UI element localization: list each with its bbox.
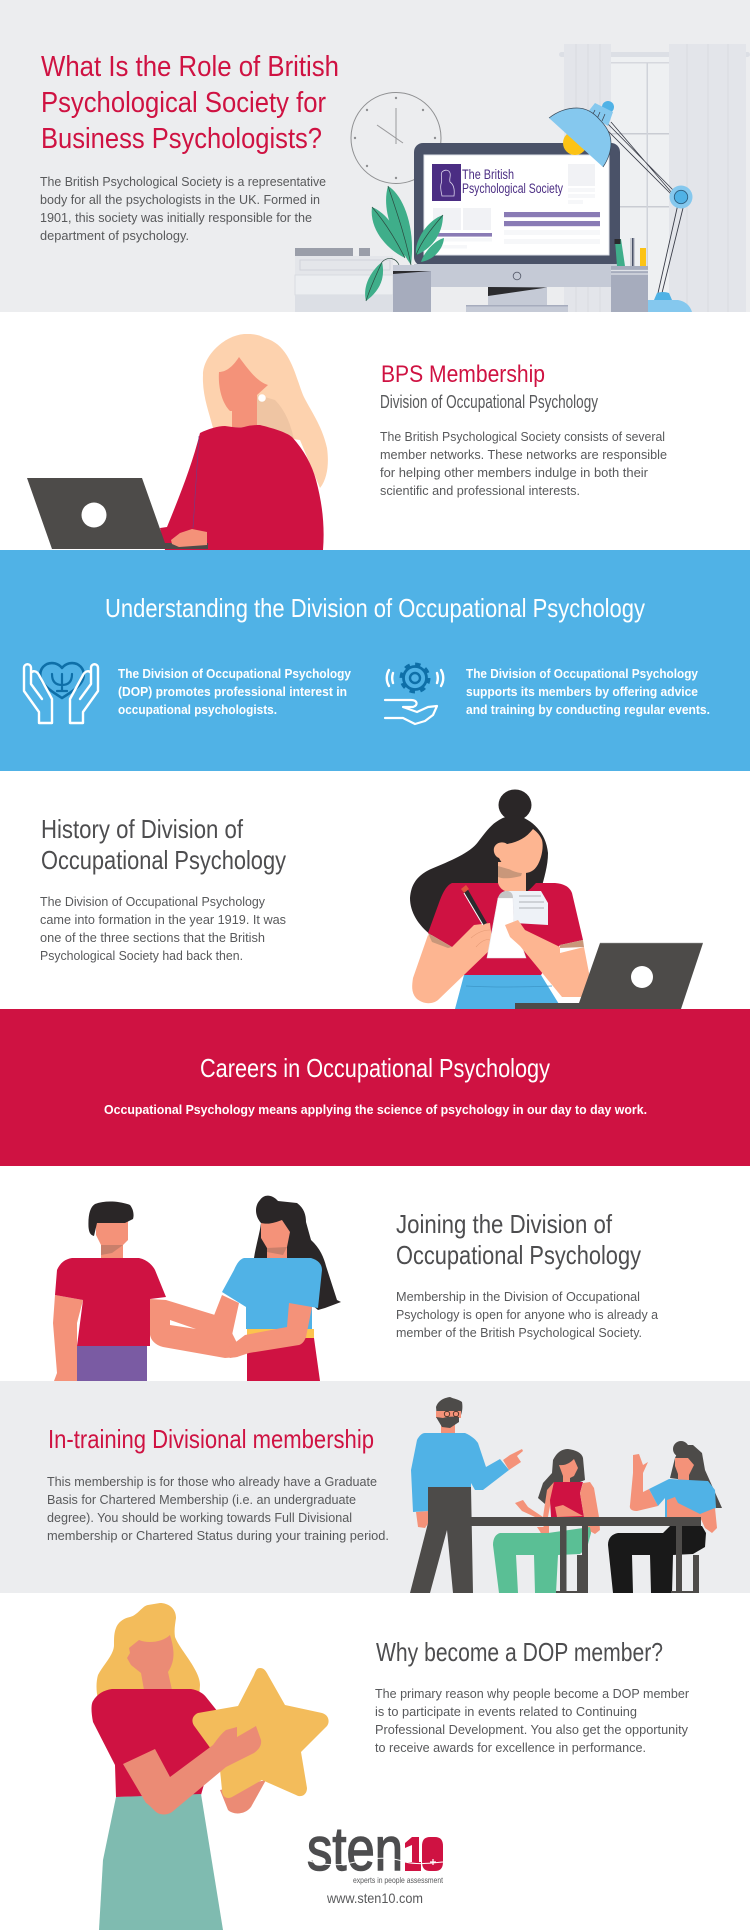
figure: seated woman right: [608, 1441, 722, 1593]
text block: DOP supports: [466, 666, 710, 717]
illustration: woman with laptop: [27, 334, 328, 550]
figure: seated woman left: [493, 1449, 600, 1593]
heading: understanding: Understanding the Division of Occupational Psychology: [105, 593, 645, 623]
text block: DOP promotes: [118, 666, 352, 717]
text block: why become: The primary reason why people become a DOP member: [375, 1686, 690, 1701]
text block: DOP promotes: The Division of Occupational Psychology: [118, 666, 352, 681]
text block: intro: The British Psychological Society is a representative: [40, 174, 326, 189]
logo: British Psychological Society: The British: [462, 167, 514, 182]
panel: joining: [53, 1196, 659, 1381]
text block: DOP promotes: (DOP) promotes professional interest in: [118, 684, 347, 699]
text block: in-training: Basis for Chartered Membership (i.e. an undergraduate: [47, 1492, 356, 1507]
text block: why become: [375, 1686, 690, 1755]
text block: why become: to receive awards for excellence in performance.: [375, 1740, 646, 1755]
heading: BPS membership: BPS Membership: [381, 361, 545, 388]
logo: sten10: experts in people assessment: [353, 1875, 444, 1885]
title: What Is the Role of British: [41, 51, 339, 83]
panel: understanding: [0, 550, 750, 771]
text block: intro: [40, 174, 326, 243]
table and chairs: [471, 1517, 701, 1593]
text block: in-training: This membership is for those who already have a Graduate: [47, 1474, 377, 1489]
text block: membership: member networks. These networks are responsible: [380, 447, 667, 462]
text block: joining: member of the British Psychological Society.: [396, 1325, 642, 1340]
text block: joining: [396, 1289, 659, 1340]
illustration: window and curtains: [559, 44, 750, 312]
title: Psychological Society for: [41, 87, 326, 119]
illustration: printer: [295, 248, 393, 312]
heading: joining: Occupational Psychology: [396, 1240, 641, 1270]
heading: why become: Why become a DOP member?: [376, 1637, 663, 1667]
panel: careers: [0, 1009, 750, 1166]
title: [41, 51, 339, 155]
heading: joining: [396, 1209, 641, 1270]
text block: DOP supports: supports its members by offering advice: [466, 684, 698, 699]
illustration: monitor: [414, 143, 620, 312]
logo: sten10: sten: [307, 1815, 403, 1883]
text block: intro: 1901, this society was initially responsible for the: [40, 210, 312, 225]
heading: history: [41, 814, 286, 875]
text block: careers: Occupational Psychology means applying the science of psychology in our day to day work.: [104, 1102, 647, 1117]
heading: history: Occupational Psychology: [41, 845, 286, 875]
icon: gear and hand: [385, 664, 443, 724]
text block: history: The Division of Occupational Psychology: [40, 894, 265, 909]
illustration: pencil cup: [611, 238, 648, 312]
text block: why become: Professional Development. You also get the opportunity: [375, 1722, 688, 1737]
text block: joining: Psychology is open for anyone who is already a: [396, 1307, 659, 1322]
text block: membership: for helping other members indulge in both their: [380, 465, 649, 480]
website link: www.sten10.com: [326, 1890, 423, 1906]
logo: British Psychological Society: [432, 164, 563, 201]
text block: DOP promotes: occupational psychologists.: [118, 702, 277, 717]
text block: membership: scientific and professional interests.: [380, 483, 580, 498]
figure: teacher: [410, 1397, 523, 1593]
panel: why become a member: [92, 1603, 690, 1930]
text block: history: [40, 894, 286, 963]
text block: intro: body for all the psychologists in the UK. Formed in: [40, 192, 320, 207]
text block: why become: is to participate in events related to Continuing: [375, 1704, 637, 1719]
heading: in-training: In-training Divisional membership: [48, 1424, 374, 1454]
text block: history: Psychological Society had back then.: [40, 948, 243, 963]
logo: British Psychological Society: Psychological Society: [462, 181, 563, 196]
icon: hands with heart: [24, 663, 98, 723]
panel: BPS membership: [27, 334, 667, 550]
icon: wall clock: [351, 92, 441, 184]
illustration: woman with notepad: [410, 790, 703, 1009]
panel: in-training: [0, 1381, 750, 1593]
text block: DOP supports: The Division of Occupational Psychology: [466, 666, 699, 681]
text block: joining: Membership in the Division of Occupational: [396, 1289, 640, 1304]
illustration: lamp: [549, 101, 692, 312]
heading: BPS membership: [380, 361, 598, 412]
heading: BPS membership: Division of Occupational Psychology: [380, 392, 598, 412]
title: Business Psychologists?: [41, 123, 322, 155]
text block: DOP supports: and training by conducting regular events.: [466, 702, 710, 717]
text block: history: came into formation in the year 1919. It was: [40, 912, 286, 927]
text block: in-training: membership or Chartered Status during your training period.: [47, 1528, 389, 1543]
illustration: meeting at table: [410, 1397, 722, 1593]
heading: history: History of Division of: [41, 814, 244, 844]
panel: history: [40, 790, 703, 1009]
illustration: woman with star: [92, 1603, 329, 1930]
text block: membership: The British Psychological Society consists of several: [380, 429, 665, 444]
text block: in-training: [47, 1474, 389, 1543]
illustration: plant: [365, 186, 444, 312]
heading: joining: Joining the Division of: [396, 1209, 613, 1239]
text block: history: one of the three sections that the British: [40, 930, 265, 945]
text block: in-training: degree). You should be working towards Full Divisional: [47, 1510, 352, 1525]
panel: hero: [0, 0, 750, 312]
text block: intro: department of psychology.: [40, 228, 189, 243]
heading: careers: Careers in Occupational Psychology: [200, 1053, 550, 1083]
text block: membership: [380, 429, 667, 498]
illustration: handshake: [53, 1196, 341, 1381]
